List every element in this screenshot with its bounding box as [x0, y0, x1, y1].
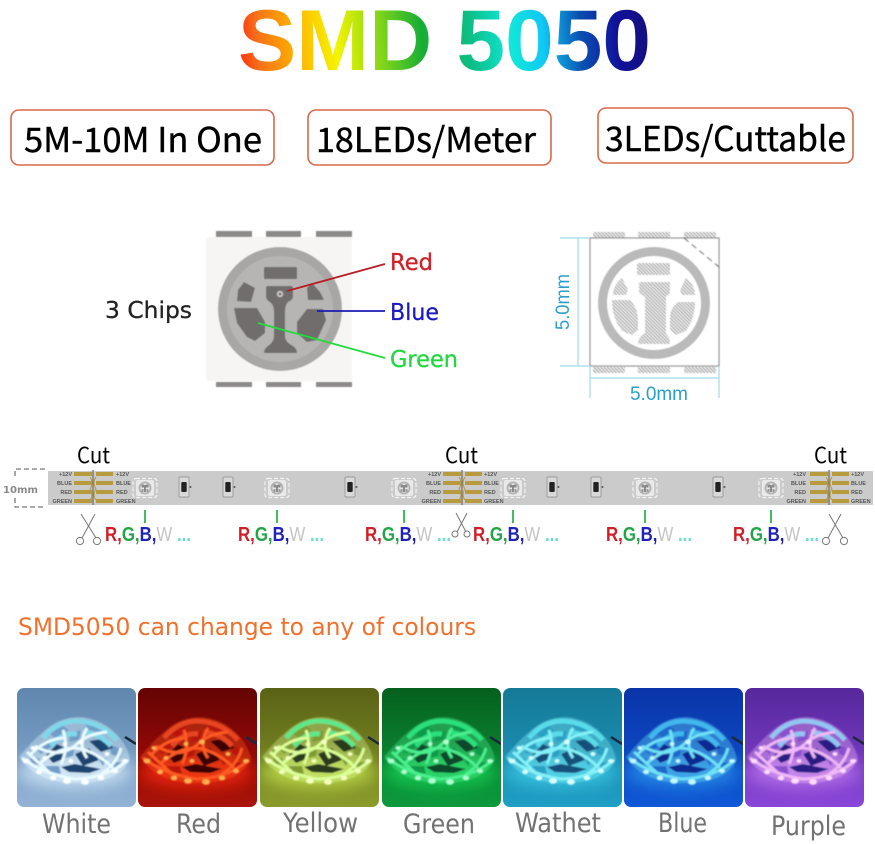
label: Green: Green: [403, 809, 475, 840]
label: White: White: [42, 809, 111, 840]
resistors on strip: [179, 477, 726, 497]
icon: scissors 3: [822, 514, 848, 545]
RGBW label 3: R,G,B,W ...: [365, 524, 451, 546]
icon: scissors 1: [76, 514, 101, 545]
10mm width marker: 10mm: [3, 485, 38, 496]
RGBW label 5: R,G,B,W ...: [606, 524, 692, 546]
RGBW label 1: R,G,B,W ...: [105, 524, 191, 546]
cut point 2: GREEN: [484, 499, 504, 505]
cut point 3: BLUE: [851, 481, 866, 487]
cut point 1: +12V: [116, 472, 129, 478]
LED chips on strip: [133, 478, 783, 498]
cut point 1: [52, 438, 136, 505]
cut point 3: RED: [851, 490, 863, 496]
colour swatch: Blue: [624, 688, 743, 807]
colour swatch: Red: [138, 688, 257, 807]
strip body: [48, 471, 873, 505]
LED chip photo: [206, 231, 352, 387]
cut point 1: RED: [60, 490, 72, 496]
10mm width marker: [3, 469, 45, 507]
callout: Green: Green: [390, 347, 458, 373]
label: Purple: Purple: [771, 811, 846, 842]
icon: scissors 2: [452, 513, 470, 537]
cut point 3: +12V: [793, 472, 806, 478]
colour swatch: Purple: [745, 688, 864, 807]
feature badge: 18LEDs/Meter: 18LEDs/Meter: [316, 113, 537, 162]
chip outline drawing: [590, 232, 719, 373]
cut point 3: BLUE: [791, 481, 806, 487]
colour swatch: Yellow: [260, 688, 379, 807]
cut point 1: BLUE: [57, 481, 72, 487]
RGBW label 2: R,G,B,W ...: [238, 524, 324, 546]
cut point 1: GREEN: [116, 499, 136, 505]
label: 3 Chips: 3 Chips: [105, 298, 192, 324]
cut point 2: BLUE: [484, 481, 499, 487]
green LED ticks: [145, 510, 771, 523]
RGBW label 6: R,G,B,W ...: [733, 524, 819, 546]
cut point 1: Cut: [77, 438, 110, 470]
callout: Green: [258, 323, 458, 373]
label: Blue: Blue: [658, 808, 707, 839]
dimension: width 5.0mm: 5.0mm: [630, 384, 688, 405]
cut point 3: [786, 438, 871, 505]
subheading: SMD5050 can change to any of colours: [18, 613, 476, 641]
cut point 2: BLUE: [426, 481, 441, 487]
callout: Blue: Blue: [390, 300, 439, 326]
cut point 3: RED: [794, 490, 806, 496]
cut point 1: BLUE: [116, 481, 131, 487]
dimension: height 5.0mm: [553, 238, 590, 366]
dimension drawing: [553, 232, 719, 405]
chip diagram with colour callouts: [105, 231, 458, 387]
cut point 1: RED: [116, 490, 128, 496]
colour swatch: Green: [382, 688, 501, 807]
RGBW label 4: R,G,B,W ...: [473, 524, 559, 546]
label: Wathet: Wathet: [515, 808, 601, 839]
callout: Red: [287, 250, 433, 291]
dimension: height 5.0mm: 5.0mm: [553, 274, 574, 330]
cut point 2: RED: [484, 490, 496, 496]
cut point 1: GREEN: [52, 499, 72, 505]
label: Red: Red: [176, 809, 221, 840]
cut point 2: [421, 438, 504, 505]
cut point 3: GREEN: [851, 499, 871, 505]
LED strip diagram: [3, 438, 873, 546]
cut point 2: RED: [429, 490, 441, 496]
label: Yellow: Yellow: [282, 808, 358, 839]
cut point 2: +12V: [428, 472, 441, 478]
cut point 2: Cut: [445, 438, 478, 470]
callout: Red: Red: [390, 250, 433, 276]
cut point 2: GREEN: [421, 499, 441, 505]
colour swatch: White: [17, 688, 136, 807]
callout: Blue: [317, 300, 439, 326]
cut point 3: Cut: [814, 438, 847, 470]
cut point 3: +12V: [851, 472, 864, 478]
colour swatch: Wathet: [503, 688, 622, 807]
cut point 1: +12V: [59, 472, 72, 478]
feature badge: 3LEDs/Cuttable: 3LEDs/Cuttable: [605, 112, 846, 161]
dimension: width 5.0mm: [590, 366, 719, 405]
cut point 3: GREEN: [786, 499, 806, 505]
feature badge: 5M-10M In One: 5M-10M In One: [24, 113, 262, 162]
cut point 2: +12V: [484, 472, 497, 478]
